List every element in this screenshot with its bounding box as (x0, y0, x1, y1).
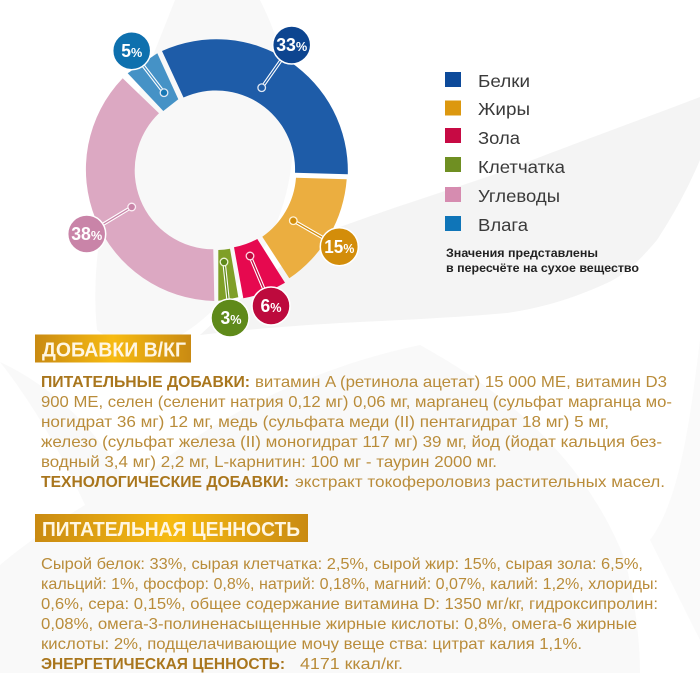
callout: 38% (68, 203, 136, 253)
text block: nutritional value: кислоты: 2%, подщелачивающие мочу веще ства: цитрат калия 1,1%. (41, 636, 582, 653)
text block: additives: 900 МЕ, селен (селенит натрия 0,12 мг) 0,06 мг, марганец (сульфат марганца мо- (41, 394, 672, 411)
legend item: Углеводы (445, 186, 560, 206)
segment: Клетчатка (218, 249, 238, 301)
heading: nutritional value: ПИТАТЕЛЬНАЯ ЦЕННОСТЬ (42, 518, 300, 541)
callout: 38%: 38% (71, 224, 103, 244)
callout: 15% (290, 217, 358, 266)
callout: 5%: 5% (121, 41, 143, 61)
segment: Жиры (262, 178, 347, 278)
legend item: Белки: Белки (478, 71, 530, 91)
segment: Белки (162, 39, 348, 174)
legend note: Значения представлены (446, 248, 598, 260)
callout: 5% (113, 32, 168, 97)
text block: nutritional value: Сырой белок: 33%, сырая клетчатка: 2,5%, сырой жир: 15%, сырая зола: 6,5%, (41, 556, 643, 573)
text block: additives: водный 3,4 мг) 2,2 мг, L-карнитин: 100 мг - таурин 2000 мг. (41, 454, 497, 471)
text block: additives: ТЕХНОЛОГИЧЕСКИЕ ДОБАВКИ: (41, 474, 289, 491)
legend (445, 71, 565, 235)
callout: 6%: 6% (260, 296, 282, 316)
text block: additives (41, 374, 672, 491)
heading: additives: ДОБАВКИ В/КГ (42, 338, 186, 362)
text block: nutritional value: 0,08%, омега-3-полиненасыщенные жирные кислоты: 0,8%, омега-6 жирные (41, 616, 637, 633)
text block: nutritional value: 0,6%, сера: 0,15%, общее содержание витамина D: 1350 мг/кг, гидроксипролин: (41, 596, 658, 613)
text block: nutritional value: кальций: 1%, фосфор: 0,8%, натрий: 0,18%, магний: 0,07%, калий: 1,2%, хлориды: (41, 576, 658, 593)
legend note (446, 248, 639, 275)
legend item: Жиры: Жиры (478, 99, 530, 119)
legend item: Белки (445, 71, 530, 91)
callout: 6% (246, 252, 290, 325)
text block: additives: ПИТАТЕЛЬНЫЕ ДОБАВКИ: (41, 374, 250, 391)
text block: nutritional value (41, 556, 658, 673)
callout: 3%: 3% (220, 308, 242, 328)
text block: additives: витамин A (ретинола ацетат) 15 000 МЕ, витамин D3 (255, 374, 667, 391)
text block: additives: железо (сульфат железа (II) моногидрат 117 мг) 39 мг, йод (йодат кальция без- (41, 434, 662, 451)
callout: 33% (258, 26, 311, 91)
legend note: в пересчёте на сухое вещество (446, 263, 639, 275)
text block: nutritional value: ЭНЕРГЕТИЧЕСКАЯ ЦЕННОСТЬ: (41, 656, 285, 673)
legend item: Жиры (445, 99, 530, 119)
callout: 3% (211, 258, 249, 337)
legend item: Углеводы: Углеводы (478, 186, 560, 206)
callout: 15%: 15% (324, 237, 355, 257)
legend item: Зола (445, 128, 520, 148)
legend item: Клетчатка: Клетчатка (478, 157, 565, 177)
segment: Зола (234, 239, 285, 298)
legend item: Зола: Зола (478, 128, 520, 148)
segment: Влага (128, 53, 178, 111)
text block: additives: ногидрат 36 мг) 12 мг, медь (сульфата меди (II) пентагидрат 18 мг) 5 мг, (41, 414, 609, 431)
donut chart (86, 39, 348, 301)
text block: additives: экстракт токофероловиз растительных масел. (295, 474, 665, 491)
text block: nutritional value: 4171 ккал/кг. (300, 656, 403, 673)
callout: 33%: 33% (276, 35, 308, 55)
legend item: Влага: Влага (478, 215, 528, 235)
legend item: Влага (445, 215, 528, 235)
legend item: Клетчатка (445, 157, 565, 177)
segment: Углеводы (86, 78, 214, 301)
